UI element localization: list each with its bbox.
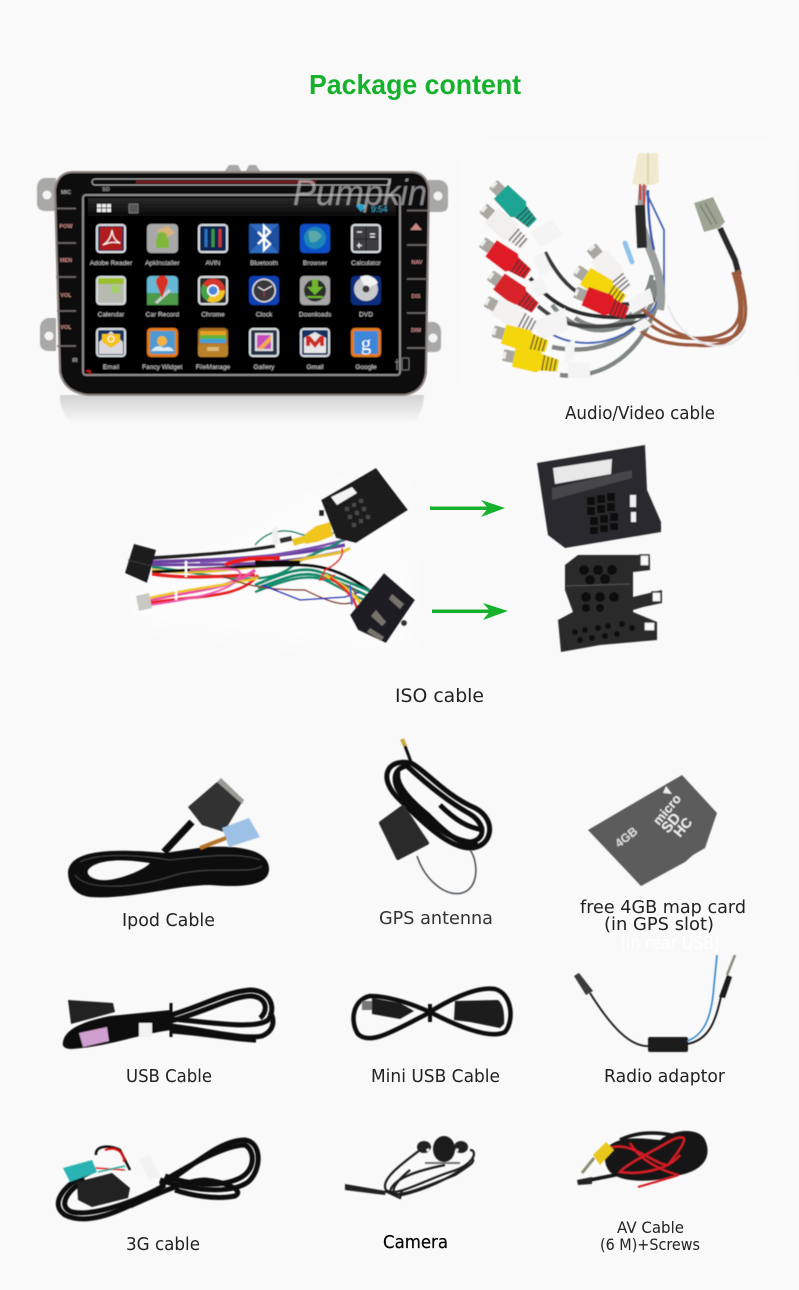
white labels	[530, 220, 654, 378]
app: Calendar	[96, 276, 126, 318]
app: Google: g	[361, 331, 372, 355]
app: Adobe Reader	[90, 224, 133, 267]
item: micro SD card: HC	[670, 814, 695, 840]
app: Google: Google	[355, 364, 377, 371]
label: AV cable	[600, 1218, 700, 1254]
item: mini USB cable	[354, 989, 511, 1038]
cable coil	[68, 847, 269, 897]
app: Clock	[249, 276, 279, 318]
app: AVIN: AVIN	[206, 260, 221, 267]
item: micro SD card: SD	[658, 810, 685, 837]
screen	[83, 195, 400, 375]
item: camera	[345, 1136, 474, 1198]
app: Calculator	[351, 224, 382, 267]
white top connector	[632, 153, 659, 205]
button labels: MEN	[60, 258, 72, 264]
gold connector	[402, 739, 405, 746]
app: Gmail	[300, 328, 330, 371]
coil	[387, 762, 490, 848]
purple plug	[79, 1027, 109, 1047]
wires	[385, 1150, 474, 1198]
top adapter connector	[537, 445, 661, 548]
white halo	[125, 475, 415, 650]
gray wires	[530, 252, 661, 376]
app: Bluetooth	[249, 224, 279, 267]
item: radio adaptor	[574, 955, 735, 1052]
reflection under head unit	[60, 395, 424, 423]
item: micro SD card: 4GB	[612, 824, 641, 850]
status bar: 9:54	[371, 204, 388, 214]
white tag	[139, 1023, 152, 1037]
lens	[433, 1136, 455, 1162]
app: Calendar: Calendar	[98, 312, 125, 318]
cable ties	[176, 561, 186, 600]
button labels: MIC	[61, 190, 71, 196]
label: Ipod cable: Ipod Cable	[122, 910, 215, 931]
app: Adobe Reader: Adobe Reader	[90, 260, 133, 267]
button labels: NAV	[411, 260, 423, 266]
title: Package content	[309, 69, 521, 100]
button labels: VOL	[60, 325, 72, 331]
button labels: VOL	[60, 293, 72, 299]
label: mini USB cable: Mini USB Cable	[371, 1066, 500, 1087]
label: ISO cable: ISO cable	[395, 685, 484, 707]
small white connector	[136, 593, 152, 611]
wires	[150, 530, 380, 615]
app: Downloads	[299, 276, 332, 318]
label: camera: Camera	[383, 1232, 448, 1253]
app: ApkInstaller	[145, 224, 180, 267]
main trunk	[640, 185, 661, 310]
panel: ISO cable harness	[125, 468, 415, 650]
left connector	[125, 544, 156, 583]
app: DVD: DVD	[359, 312, 373, 318]
app: Car Record: Car Record	[145, 312, 179, 318]
watermark: Pumpkin	[293, 172, 427, 213]
app: DVD	[351, 275, 381, 318]
label: AV cable: (6 M)+Screws	[600, 1235, 700, 1254]
bottom adapter connector	[558, 555, 662, 652]
side button dividers	[55, 208, 428, 348]
label: AV cable: AV Cable	[617, 1218, 684, 1237]
label: map card: (in GPS slot)	[604, 914, 714, 935]
dock connector	[188, 782, 242, 832]
item: USB cable	[63, 990, 273, 1049]
blue plug	[222, 818, 260, 847]
left coil mass	[63, 1010, 171, 1049]
app: AVIN	[198, 224, 228, 267]
cable highlights	[75, 855, 262, 886]
button labels: SD	[102, 187, 110, 193]
app: Clock: Clock	[256, 312, 273, 318]
app: ApkInstaller: ApkInstaller	[145, 260, 180, 267]
white thin wire	[668, 305, 745, 346]
usb port	[395, 358, 409, 370]
gray right connector	[694, 197, 739, 275]
item: AV cable	[577, 1131, 708, 1187]
app: Bluetooth: Bluetooth	[250, 260, 278, 267]
button labels	[59, 187, 423, 364]
yellow RCA	[280, 522, 333, 546]
app: FileManage: FileManage	[196, 364, 231, 371]
app: Gmail: Gmail	[306, 364, 324, 371]
item: Ipod cable	[68, 778, 269, 897]
button labels: POW	[59, 224, 73, 230]
app: Gallery: Gallery	[254, 364, 275, 371]
item: 3G cable	[58, 1140, 258, 1219]
app: Car Record	[145, 276, 179, 318]
bottom connector	[350, 573, 415, 643]
plug	[345, 1184, 386, 1195]
faint hidden note: (in rear USB)	[620, 933, 720, 954]
brown wires	[640, 270, 746, 346]
app: FileManage	[196, 328, 231, 371]
black box	[77, 1173, 130, 1207]
label: 3G cable: 3G cable	[126, 1234, 200, 1255]
item: GPS antenna	[381, 739, 490, 894]
panel: head unit	[37, 165, 448, 423]
blue wire	[545, 190, 664, 343]
app: Email	[96, 328, 126, 371]
item: micro SD card: micro	[650, 791, 684, 828]
app: Chrome: Chrome	[201, 312, 225, 318]
white photo backdrop	[470, 150, 785, 390]
blue stick	[625, 243, 632, 262]
arrow: bottom	[432, 603, 508, 620]
yellow RCA	[593, 1142, 614, 1165]
disc slot	[92, 179, 390, 185]
red wires	[610, 1137, 684, 1187]
teal plug	[63, 1160, 97, 1182]
label: audio/video cable: Audio/Video cable	[565, 403, 715, 424]
label: map card	[580, 897, 746, 935]
label tag	[139, 1155, 160, 1180]
app: Google	[351, 328, 381, 371]
app: Gallery	[249, 328, 279, 371]
mini plug	[362, 998, 414, 1019]
RCA plugs	[476, 176, 635, 376]
item: micro SD card	[588, 775, 717, 886]
antenna puck	[381, 807, 427, 858]
device body	[55, 172, 429, 395]
button labels: IR	[72, 358, 78, 364]
thin wire	[417, 850, 476, 894]
app: Fancy Widget: Fancy Widget	[142, 364, 183, 371]
panel: audio/video cable	[470, 150, 785, 390]
corner mark	[86, 371, 90, 375]
status bar	[88, 198, 396, 216]
label: radio adaptor: Radio adaptor	[604, 1066, 726, 1087]
arrow: top	[430, 500, 505, 517]
app: Browser	[300, 224, 330, 267]
app: Browser: Browser	[303, 260, 328, 267]
black coil mass	[605, 1131, 708, 1181]
button labels: DIM	[411, 328, 421, 334]
label: USB cable: USB Cable	[126, 1066, 212, 1087]
usb plug	[68, 1000, 115, 1024]
app: Fancy Widget	[142, 328, 183, 371]
label: GPS antenna: GPS antenna	[379, 908, 493, 929]
label: map card: free 4GB map card	[580, 897, 746, 918]
top connector	[319, 468, 408, 543]
app: Chrome	[198, 276, 228, 318]
button labels: DIS	[411, 294, 421, 300]
mounting ears	[37, 165, 448, 352]
female plug	[454, 1000, 504, 1028]
app: Downloads: Downloads	[299, 312, 332, 318]
app: Email: Email	[103, 364, 120, 371]
app: Calculator: Calculator	[351, 260, 382, 267]
